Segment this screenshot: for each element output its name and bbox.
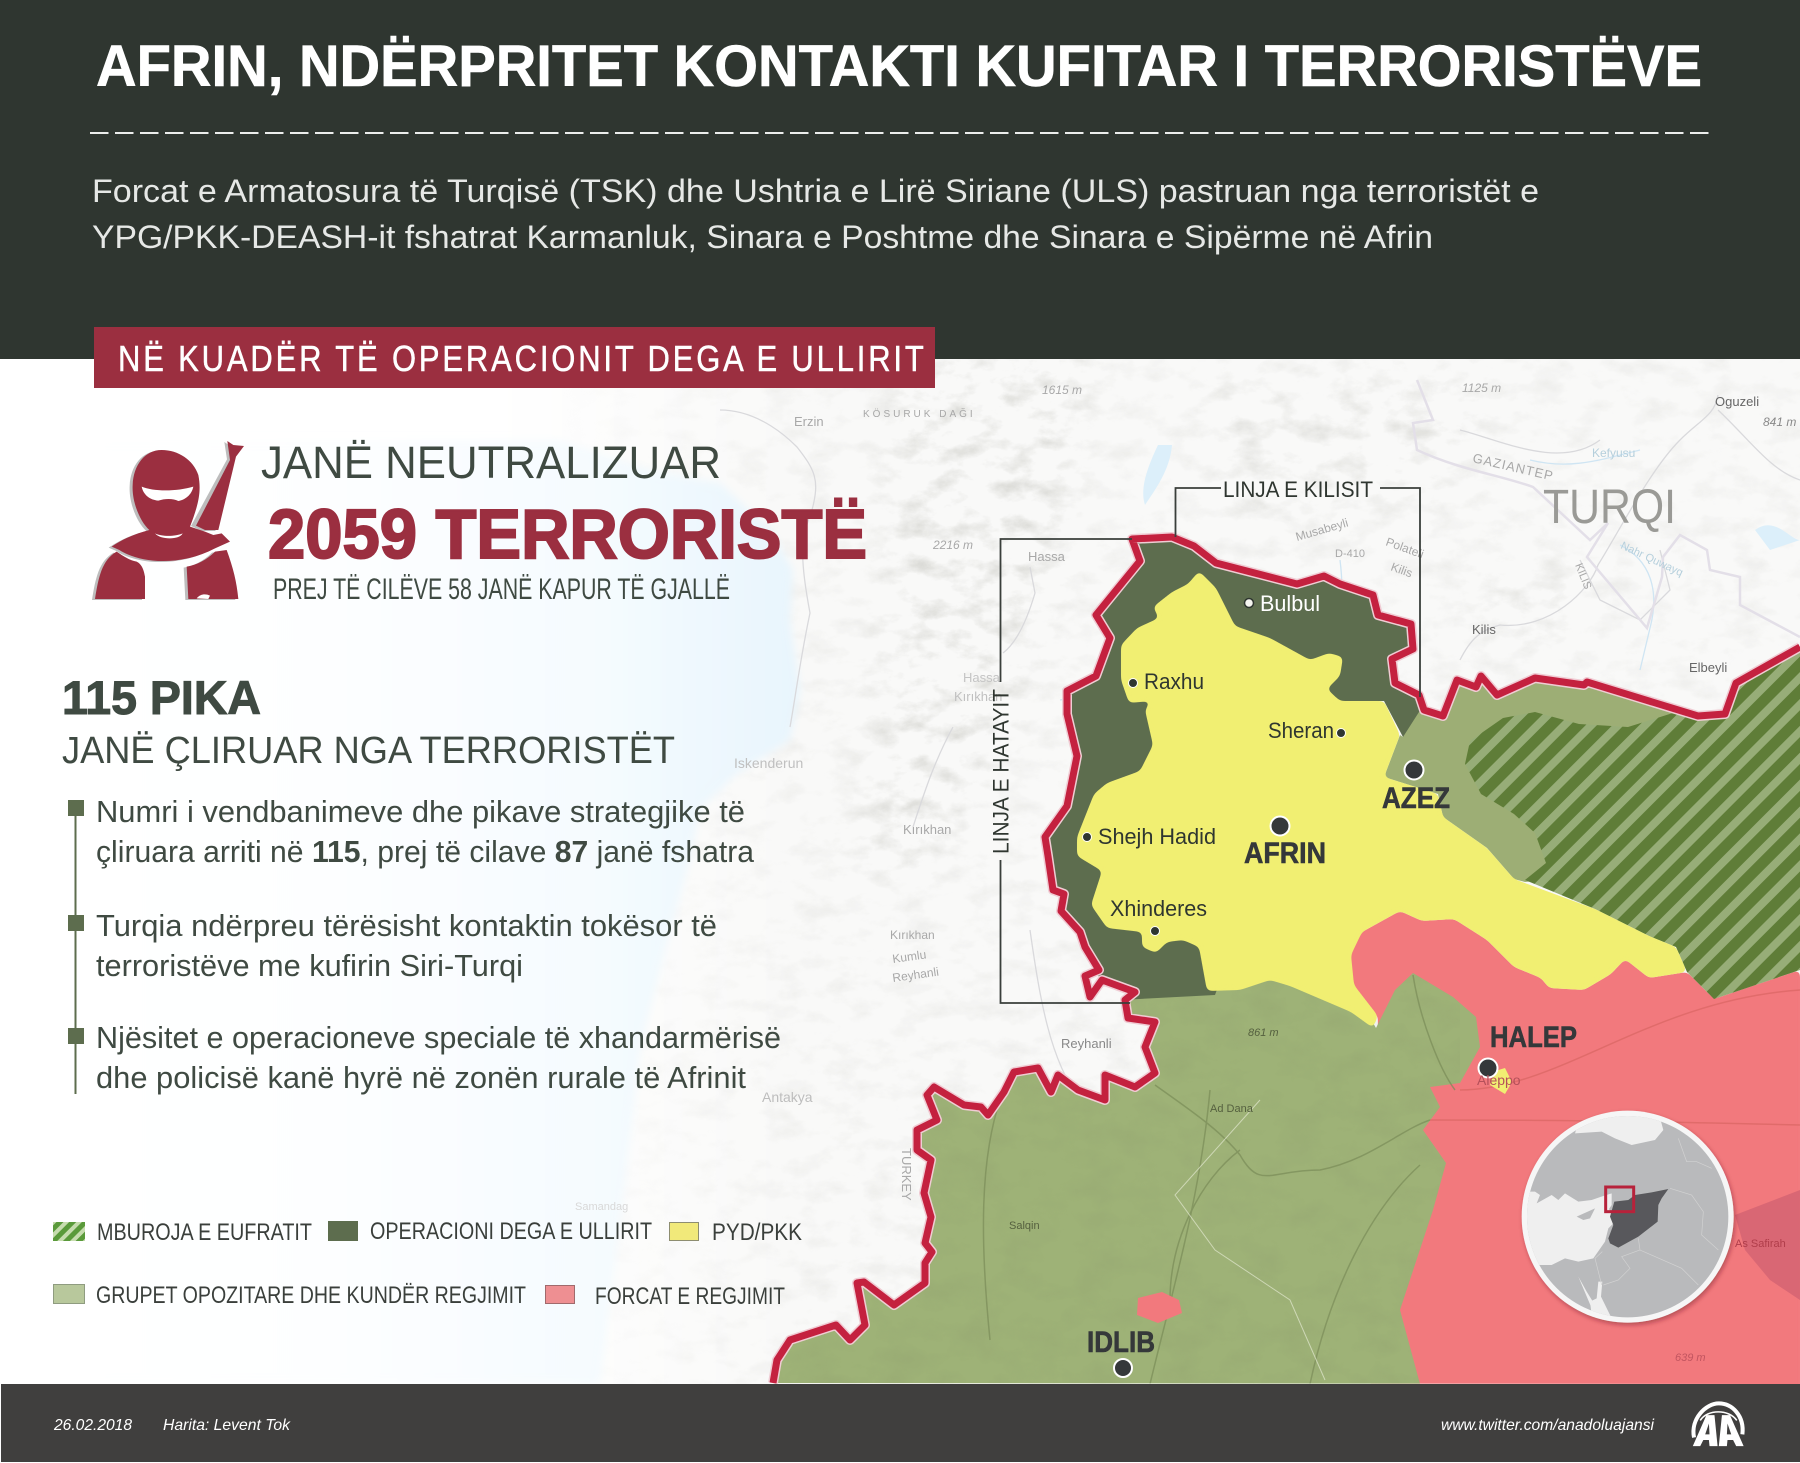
base map: KÖSURUK DAĞI	[863, 407, 976, 420]
Mediterranean	[1522, 1192, 1615, 1265]
small map labels: Salqin	[1009, 1220, 1040, 1232]
base map: KILIS	[1572, 562, 1593, 591]
base map: Kırıkhan	[903, 822, 951, 837]
base map: Nahr Quwayq	[1619, 540, 1685, 579]
city: Afrin	[1244, 816, 1326, 870]
bullet 1	[68, 794, 755, 869]
region: opposition groups Azez	[1386, 683, 1672, 882]
title: AFRIN, NDËRPRITET KONTAKTI KUFITAR I TERRORISTËVE	[96, 34, 1702, 99]
city: Azez	[1382, 760, 1450, 815]
legend: Euphrates Shield: MBUROJA E EUFRATIT	[97, 1219, 312, 1246]
base map: Hassa	[1028, 549, 1066, 564]
label: Turqi: TURQI	[1543, 481, 1676, 534]
text: liberated subtitle: JANË ÇLIRUAR NGA TERRORISTËT	[62, 730, 675, 772]
region: PYD/PKK	[1077, 571, 1687, 1028]
roads	[983, 975, 1455, 1384]
city: Halep: HALEP	[1490, 1021, 1577, 1054]
legend	[53, 1218, 802, 1310]
subtitle text	[92, 173, 1539, 255]
location marker	[1606, 1187, 1634, 1212]
place: Raxhu: Raxhu	[1144, 669, 1204, 694]
small map labels: 639 m	[1675, 1352, 1706, 1364]
place: Bulbul: Bulbul	[1260, 591, 1320, 616]
text: neutralized heading: JANË NEUTRALIZUAR	[261, 437, 721, 488]
city: Halep	[1477, 1021, 1577, 1088]
small map labels: As Safirah	[1735, 1238, 1786, 1250]
legend: regime forces	[546, 1283, 785, 1310]
base map: Reyhanli	[891, 965, 940, 985]
base map: Kırıkhan	[954, 689, 1002, 704]
place: Shejh Hadid: Shejh Hadid	[1098, 824, 1216, 849]
bullet 1: çliruara arriti në 115, prej të cilave 87 janë fshatra	[96, 834, 755, 869]
icon: masked terrorist	[92, 441, 244, 600]
base map: Kırıkhan	[890, 928, 935, 942]
base map: Polateli	[1384, 535, 1426, 561]
Syria	[1608, 1189, 1668, 1248]
place: Xhinderes	[1110, 896, 1207, 936]
bullet 3: dhe policisë kanë hyrë në zonën rurale të Afrinit	[96, 1060, 746, 1095]
legend: regime forces: FORCAT E REGJIMIT	[595, 1283, 785, 1310]
bullet 1: Numri i vendbanimeve dhe pikave strategjike të	[96, 794, 745, 829]
text: captured alive: PREJ TË CILËVE 58 JANË KAPUR TË GJALLË	[273, 573, 730, 606]
inset globe locator	[1522, 1111, 1734, 1323]
city: Azez: AZEZ	[1382, 782, 1450, 815]
legend: PYD/PKK: PYD/PKK	[712, 1219, 802, 1246]
base map: Reyhanli	[1061, 1036, 1112, 1051]
base map: 1615 m	[1042, 383, 1082, 397]
base map: Oguzeli	[1715, 394, 1759, 409]
base map: Iskenderun	[734, 755, 803, 771]
Red Sea	[1578, 1277, 1610, 1316]
icon shadow	[92, 442, 241, 600]
banner: NË KUADËR TË OPERACIONIT DEGA E ULLIRIT	[118, 340, 924, 380]
small map labels: 861 m	[1248, 1027, 1279, 1039]
base map: 841 m	[1763, 415, 1796, 429]
border: Syria-Turkey	[773, 537, 1800, 1383]
text: 115 points: 115 PIKA	[62, 671, 261, 724]
label: Linja e Hatayit: LINJA E HATAYIT	[988, 689, 1014, 854]
bullet 3: Njësitet e operacioneve speciale të xhandarmërisë	[96, 1020, 781, 1055]
base map: D-410	[1335, 548, 1365, 560]
subtitle text: Forcat e Armatosura të Turqisë (TSK) dhe Ushtria e Lirë Siriane (ULS) pastruan nga terroristët e	[92, 173, 1539, 209]
region: regime pocket near Idlib	[1137, 1292, 1182, 1323]
base map: Kilis	[1472, 622, 1496, 637]
banner	[94, 327, 935, 388]
legend: opposition: GRUPET OPOZITARE DHE KUNDËR REGJIMIT	[96, 1282, 526, 1309]
footer: credit: Harita: Levent Tok	[163, 1417, 291, 1434]
base map: Kefyusu	[1592, 446, 1635, 460]
legend: Olive Branch: OPERACIONI DEGA E ULLIRIT	[370, 1218, 652, 1245]
subtitle text: YPG/PKK-DEASH-it fshatrat Karmanluk, Sinara e Poshtme dhe Sinara e Sipërme në Afrin	[92, 219, 1433, 255]
bullet list	[68, 794, 781, 1095]
bullet 3	[68, 1020, 781, 1095]
base map: TURKEY	[899, 1148, 914, 1201]
label: Linja e Kilisit: LINJA E KILISIT	[1223, 477, 1373, 502]
base map: Elbeyli	[1689, 660, 1727, 675]
small map labels	[1009, 1027, 1786, 1364]
city: Idlib	[1087, 1326, 1155, 1377]
bullet 2: terroristëve me kufirin Siri-Turqi	[96, 948, 523, 983]
Cyprus	[1577, 1208, 1595, 1220]
base map: Kilis	[1389, 560, 1414, 580]
border glow	[773, 537, 1800, 1383]
Black Sea	[1575, 1116, 1664, 1145]
bullet 2	[68, 908, 717, 983]
city: Halep: Aleppo	[1477, 1072, 1521, 1088]
region: yellow Aleppo pocket	[1490, 1068, 1512, 1094]
header band	[0, 0, 1800, 359]
city: Idlib: IDLIB	[1087, 1326, 1155, 1359]
base map: GAZIANTEP	[1471, 450, 1555, 484]
base map: Erzin	[794, 414, 824, 429]
footer band	[1, 1384, 1800, 1462]
footer: date: 26.02.2018	[53, 1417, 132, 1434]
base map: Kumlu	[891, 947, 927, 966]
place: Sheran: Sheran	[1268, 718, 1334, 743]
base map: 1125 m	[1462, 381, 1501, 395]
base map: 2216 m	[932, 538, 973, 552]
map regions	[760, 530, 1800, 1420]
text: 2059 terrorists: 2059 TERRORISTË	[268, 495, 867, 573]
region: Euphrates Shield	[1465, 640, 1800, 999]
line: Hatay line frame	[1000, 539, 1132, 1003]
region: opposition groups south	[760, 965, 1480, 1384]
base map: Hassa	[963, 670, 1001, 685]
legend: PYD/PKK	[670, 1219, 802, 1246]
region: regime forces	[1340, 911, 1800, 1420]
base map: Musabeyli	[1294, 516, 1350, 544]
region: darker patch As Safirah	[1735, 1190, 1800, 1300]
region: Olive Branch operation	[1030, 530, 1425, 1000]
small map labels: Ad Dana	[1210, 1103, 1254, 1115]
footer: url: www.twitter.com/anadoluajansi	[1441, 1417, 1654, 1434]
line: Kilis line frame	[1176, 488, 1420, 697]
base map: Samandag	[575, 1201, 628, 1213]
icon: AA logo	[1693, 1403, 1744, 1446]
city: Afrin: AFRIN	[1244, 837, 1326, 870]
base map: Antakya	[762, 1089, 813, 1105]
bullet 2: Turqia ndërpreu tërësisht kontaktin tokësor të	[96, 908, 717, 943]
icon body	[95, 441, 244, 599]
base map	[538, 359, 1800, 1384]
place: Xhinderes: Xhinderes	[1110, 896, 1207, 921]
